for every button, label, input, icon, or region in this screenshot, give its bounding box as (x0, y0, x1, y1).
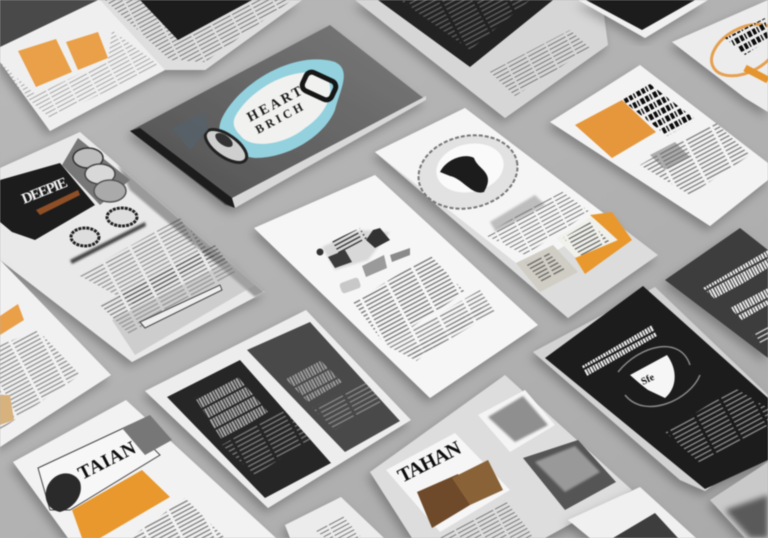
poster text rows (665, 388, 768, 463)
circular badge (412, 126, 524, 218)
black clasp (300, 70, 338, 102)
emblem headline: HEART (245, 84, 305, 126)
orange boxes (18, 39, 72, 87)
blob headline: DEEPIE (20, 175, 70, 208)
leaflet: top-right white sheet with orange swirl (672, 0, 768, 112)
leaflet: bottom right white sheet (568, 487, 696, 538)
gray highlight (490, 195, 545, 232)
leaflet: bottom center collage: TAHAN (394, 437, 465, 487)
shield (630, 355, 675, 398)
leaflet: bottom mini white sheet (285, 497, 384, 538)
leaflet: top-left open brochure (0, 0, 302, 131)
leaflet: center-right sheet with circular photo (375, 108, 658, 318)
leaflet: top center translucent sheet (355, 0, 608, 118)
bold title (622, 84, 696, 136)
small book spread (516, 245, 578, 292)
illustrated seeds (62, 138, 130, 205)
poster headline (582, 325, 657, 376)
photo card (523, 440, 616, 510)
body text (640, 122, 750, 195)
leaflet: left lower white sheet (0, 260, 111, 447)
leaflet: black twin panels (145, 310, 411, 508)
leaflet: dark gray brochure with teal emblem: BRICH (253, 100, 306, 137)
black header (378, 0, 553, 67)
seals (71, 228, 99, 246)
leaflet: large black poster: Sfe (639, 372, 657, 388)
body text rows (353, 255, 465, 345)
orange tab (575, 212, 632, 274)
leaflet: right dark gray poster (665, 228, 768, 358)
photo panel (38, 425, 160, 510)
cover card (386, 433, 510, 532)
leaflet: top black card (578, 0, 708, 38)
dark photo (0, 0, 98, 47)
dark gray panel (247, 322, 400, 452)
leaflet: right white sheet with orange block (550, 65, 768, 226)
orange band (72, 470, 170, 538)
orange block (575, 100, 656, 158)
left machine icon (200, 123, 252, 169)
leaflet: center white document (254, 175, 538, 398)
text body (78, 218, 215, 305)
text lines (485, 190, 590, 255)
orange label (0, 304, 24, 335)
leaflet: large black poster (533, 286, 768, 491)
leaflet: dark gray brochure with teal emblem (130, 25, 426, 208)
black panel (140, 0, 252, 40)
black panel (167, 360, 331, 498)
leaflet: bottom center collage (370, 375, 632, 538)
leaflet: bottom-right corner sheet (710, 462, 768, 538)
black blob header (0, 163, 95, 240)
teal emblem (219, 59, 344, 158)
sketch card (478, 390, 555, 452)
leaflet: bottom-left sheet with orange band (13, 400, 276, 538)
leaflet: left brochure with dark header (0, 132, 265, 362)
header graphic (322, 230, 390, 270)
portrait silhouette (440, 156, 488, 193)
body text (130, 498, 225, 538)
heading: TAIAN (75, 437, 140, 484)
book photos (417, 474, 470, 528)
